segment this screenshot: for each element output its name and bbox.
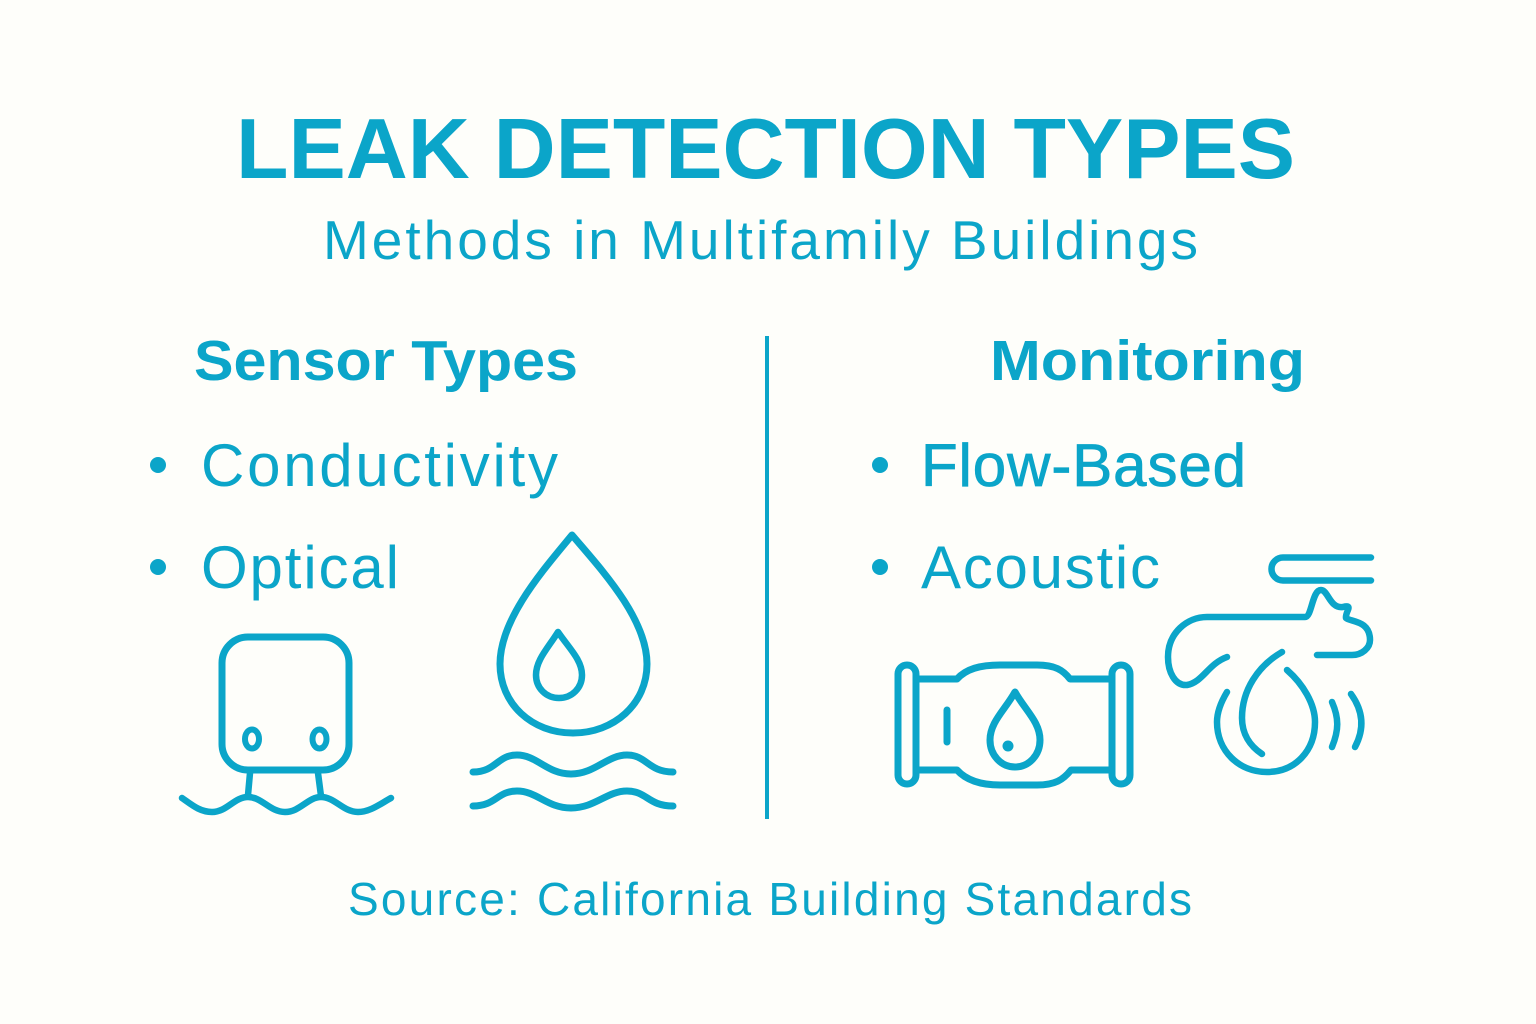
subtitle: Methods in Multifamily Buildings [323, 209, 1198, 271]
panel: sensor types [150, 329, 673, 812]
heading: sensor types: Sensor Types [194, 329, 578, 393]
bullet item: optical: Optical [201, 534, 399, 601]
icon: water drop over waves [473, 535, 673, 808]
bullet item: conductivity: Conductivity [201, 432, 558, 499]
icon: pipe with flow sensor [898, 665, 1130, 785]
heading: monitoring: Monitoring [990, 329, 1305, 393]
bullet item: flow-based: Flow-Based [921, 432, 1246, 499]
panel: monitoring [872, 329, 1371, 785]
title: LEAK DETECTION TYPES [236, 102, 1295, 197]
center divider [765, 336, 769, 819]
bullet item: acoustic: Acoustic [921, 534, 1160, 601]
icon: conductivity sensor in water [182, 637, 391, 812]
source note: Source: California Building Standards [348, 873, 1192, 925]
icon: faucet with acoustic drip [1168, 558, 1371, 772]
